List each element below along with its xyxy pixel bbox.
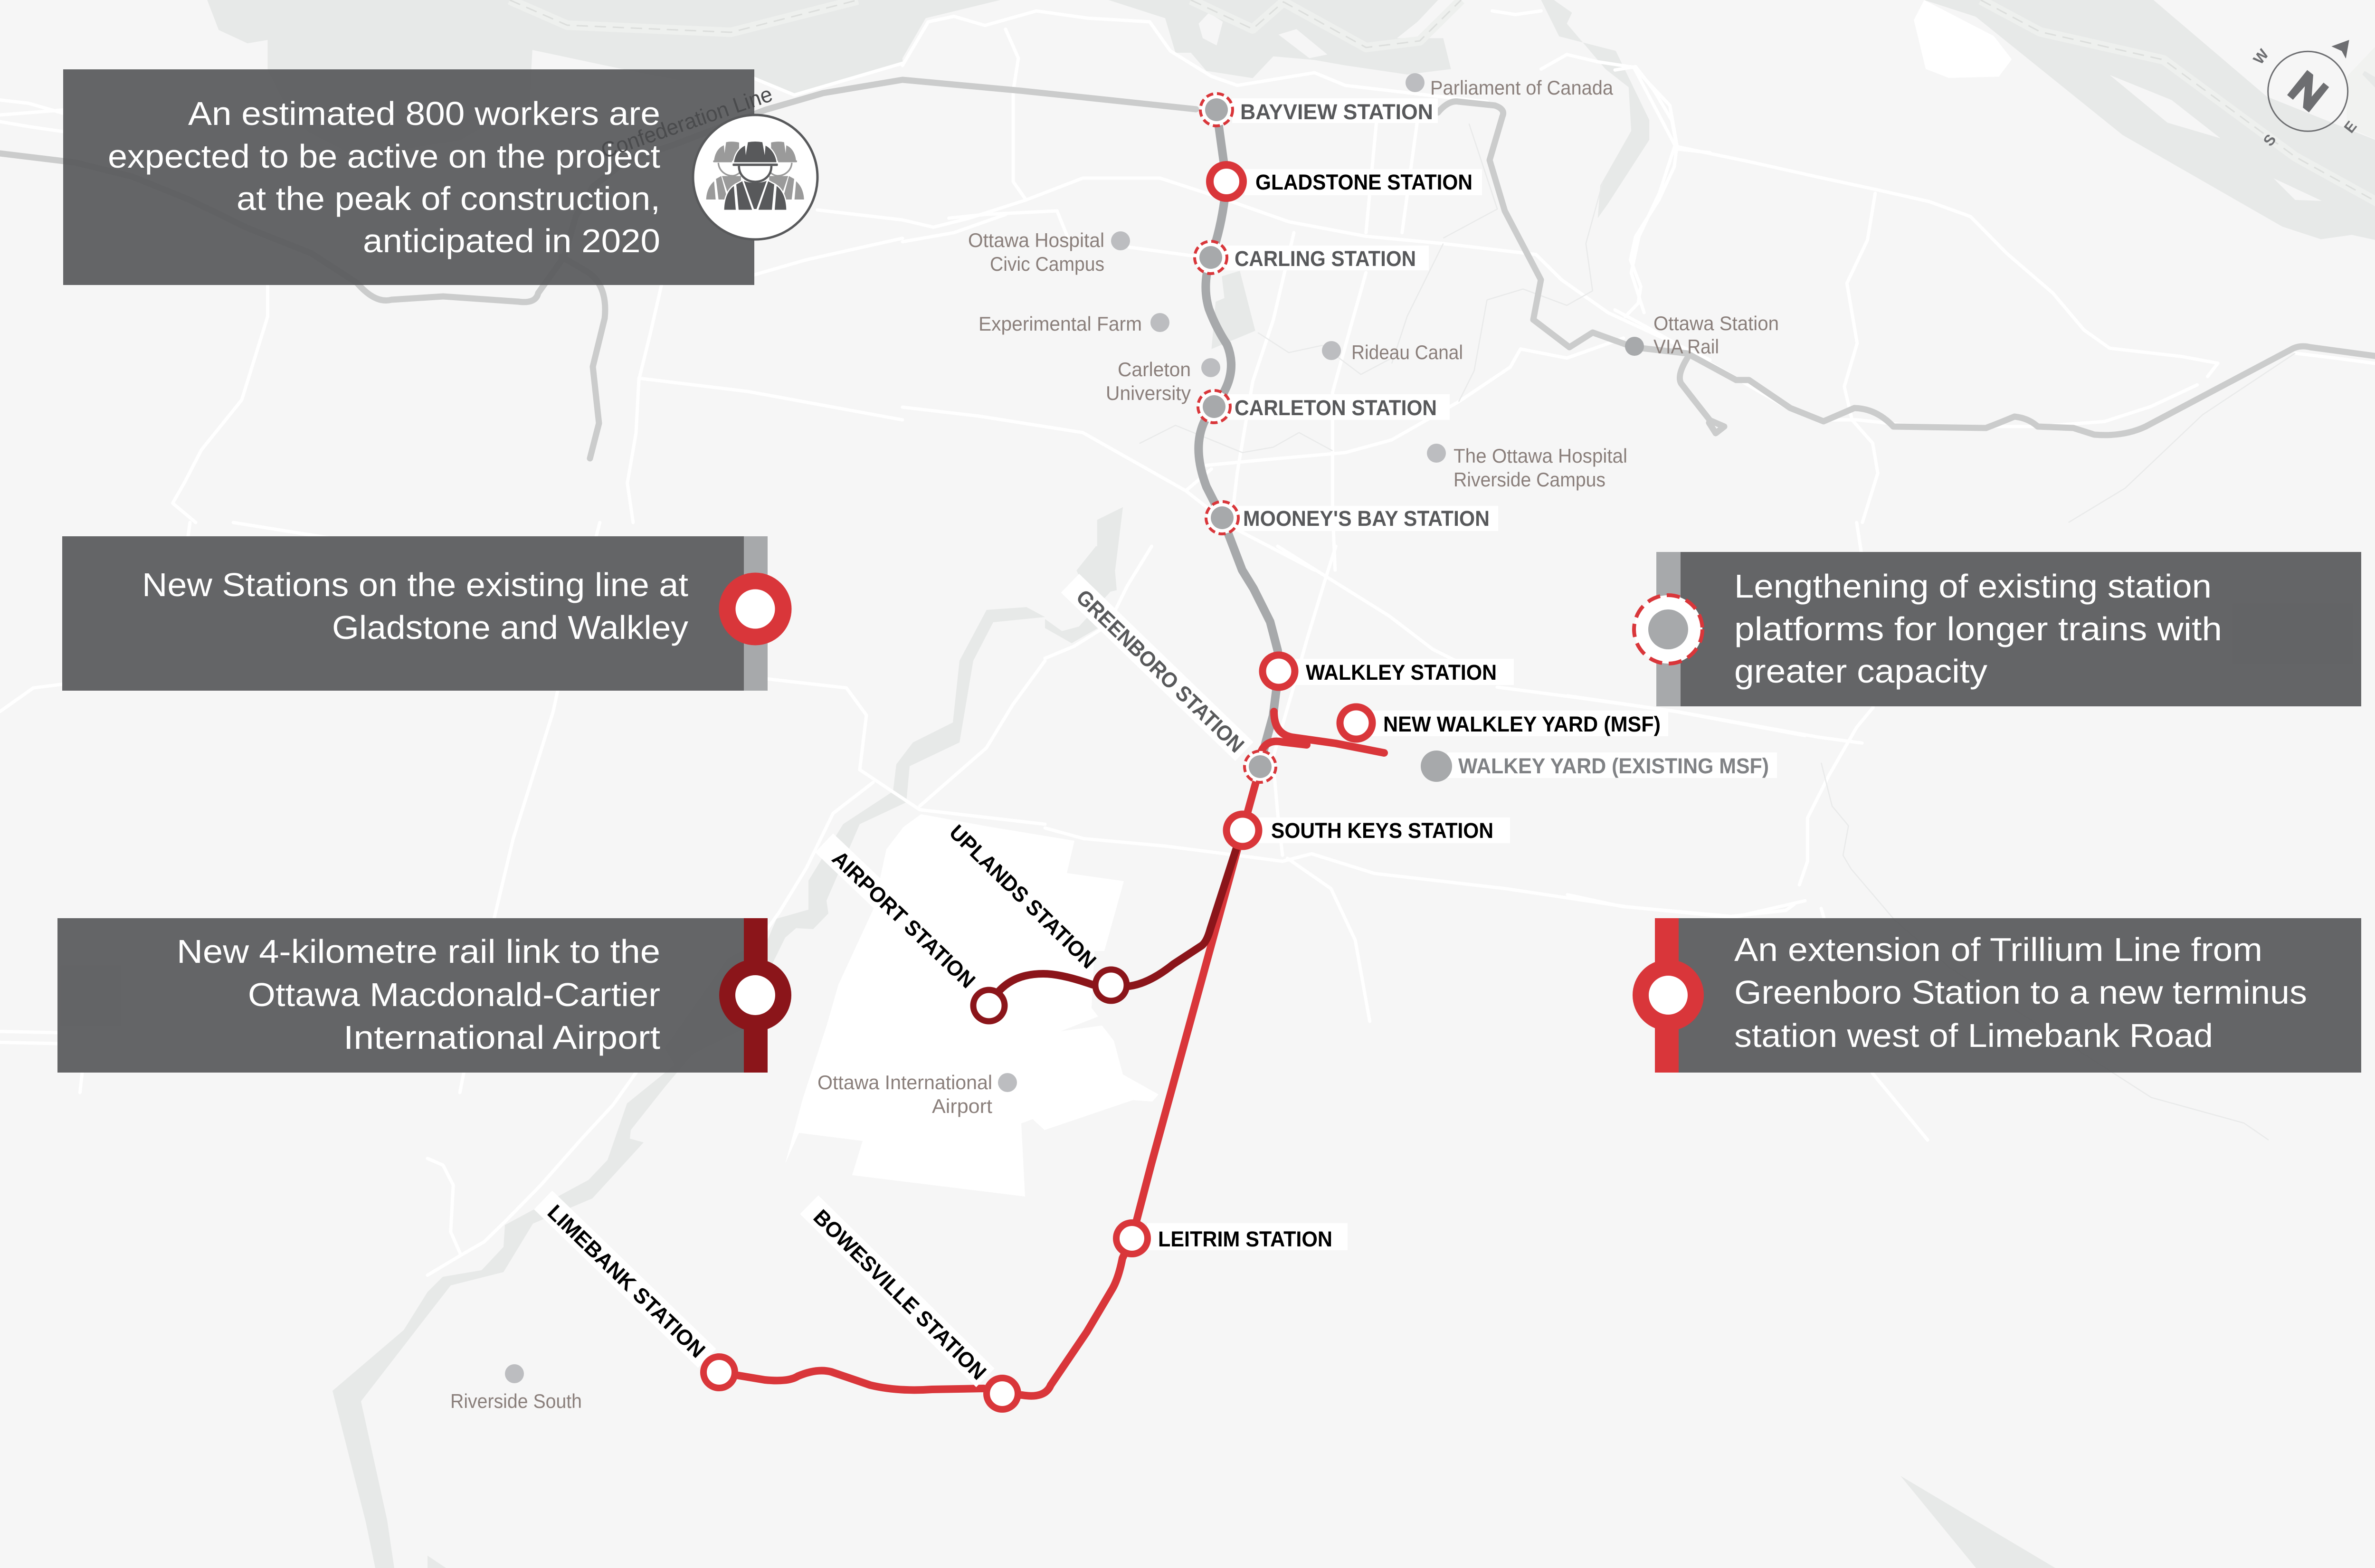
icon: new station marker <box>727 581 783 637</box>
panel text: platform lengthening: greater capacity <box>1734 653 1987 690</box>
station: Carling <box>1195 241 1429 274</box>
landmark: Experimental Farm: Experimental Farm <box>978 313 1142 335</box>
Confederation Line track <box>0 80 2375 458</box>
station: Carleton <box>1198 390 1450 423</box>
landmark: The Ottawa Hospital Riverside Campus <box>1427 444 1627 491</box>
station: Mooney's Bay <box>1206 502 1498 534</box>
station: Bayview: BAYVIEW STATION <box>1240 100 1433 124</box>
icon: compass <box>2250 40 2360 149</box>
station: Greenboro: GREENBORO STATION <box>1072 585 1249 757</box>
panel text: platform lengthening: platforms for longer trains with <box>1734 610 2222 647</box>
icon: compass: S <box>2260 131 2280 149</box>
landmark: Riverside South <box>450 1364 582 1412</box>
panel text: new stations: Gladstone and Walkley <box>332 609 688 646</box>
landmark: Ottawa Station VIA Rail: Ottawa Station <box>1653 312 1779 334</box>
panel: airport rail link legend <box>57 918 783 1073</box>
panel text: new stations <box>142 566 688 646</box>
panel: workers callout <box>63 69 817 285</box>
station: Limebank <box>534 1190 735 1388</box>
station: New Walkley Yard <box>1340 707 1668 739</box>
station: Airport <box>815 834 1005 1021</box>
station: Limebank: LIMEBANK STATION <box>543 1200 710 1362</box>
landmark: Carleton University <box>1106 358 1220 404</box>
landmark: Rideau Canal: Rideau Canal <box>1351 341 1463 363</box>
station: Uplands: UPLANDS STATION <box>945 820 1101 973</box>
panel text: line extension <box>1734 931 2307 1054</box>
existing Trillium Line (grey) <box>1198 110 1279 767</box>
landmark: Carleton University: Carleton <box>1118 358 1191 380</box>
panel text: workers: An estimated 800 workers are <box>188 95 660 132</box>
panel text: line extension: An extension of Trillium Line from <box>1734 931 2262 968</box>
panel text: line extension: Greenboro Station to a new terminus <box>1734 974 2307 1011</box>
station: Airport: AIRPORT STATION <box>827 846 980 993</box>
station: Carleton: CARLETON STATION <box>1235 396 1437 420</box>
panel text: airport link <box>177 933 660 1056</box>
landmark: Ottawa International Airport <box>817 1071 1017 1117</box>
station: Carling: CARLING STATION <box>1235 247 1416 271</box>
station: Leitrim <box>1116 1223 1348 1254</box>
landmark: The Ottawa Hospital Riverside Campus: Riverside Campus <box>1454 468 1606 491</box>
station: Gladstone: GLADSTONE STATION <box>1255 170 1472 194</box>
station: Leitrim: LEITRIM STATION <box>1158 1227 1332 1251</box>
icon: lengthened station marker <box>1634 595 1702 664</box>
panel: new stations legend <box>62 536 783 691</box>
icon: compass: W <box>2250 46 2272 67</box>
station: Mooney's Bay: MOONEY'S BAY STATION <box>1243 506 1490 531</box>
icon: extension marker <box>1641 968 1696 1023</box>
panel text: platform lengthening <box>1734 568 2222 690</box>
panel text: airport link: International Airport <box>343 1019 660 1056</box>
panel text: workers: at the peak of construction, <box>237 180 660 217</box>
station: New Walkley Yard: NEW WALKLEY YARD (MSF) <box>1383 712 1661 736</box>
Trillium extension line (red) <box>719 767 1260 1396</box>
station: Bowesville: BOWESVILLE STATION <box>809 1205 991 1385</box>
landmark: Ottawa International Airport: Ottawa International <box>817 1071 992 1093</box>
icon: construction workers <box>693 115 817 239</box>
panel text: workers: expected to be active on the project <box>108 138 660 175</box>
landmark: Carleton University: University <box>1106 382 1191 404</box>
landmark: Ottawa Hospital Civic Campus <box>968 229 1130 275</box>
panel text: line extension: station west of Limebank Road <box>1734 1017 2213 1054</box>
landmark: Ottawa Hospital Civic Campus: Civic Campus <box>990 253 1104 275</box>
airport rail link (dark red) <box>989 841 1239 1006</box>
station: Gladstone <box>1210 165 1482 198</box>
panel text: workers: anticipated in 2020 <box>363 222 660 259</box>
landmark: Ottawa International Airport: Airport <box>932 1095 992 1117</box>
landmark: Ottawa Hospital Civic Campus: Ottawa Hospital <box>968 229 1104 251</box>
station: Walkley <box>1263 655 1514 687</box>
landmark: The Ottawa Hospital Riverside Campus: The Ottawa Hospital <box>1454 445 1627 467</box>
icon: airport link marker <box>727 967 783 1023</box>
station: South Keys <box>1226 814 1510 846</box>
panel text: airport link: Ottawa Macdonald-Cartier <box>248 976 660 1013</box>
panel: line extension legend <box>1641 918 2361 1073</box>
icon: compass: E <box>2340 118 2360 136</box>
station: South Keys: SOUTH KEYS STATION <box>1271 818 1493 843</box>
panel text: new stations: New Stations on the existing line at <box>142 566 688 603</box>
panel text: platform lengthening: Lengthening of existing station <box>1734 568 2212 605</box>
landmark: Ottawa Station VIA Rail: VIA Rail <box>1653 335 1719 358</box>
landmark: Parliament of Canada: Parliament of Canada <box>1430 76 1614 99</box>
panel: platform lengthening legend <box>1634 552 2361 706</box>
base map: river border strips <box>510 0 2375 217</box>
station: Walkley: WALKLEY STATION <box>1306 660 1497 684</box>
station: Walkley Yard existing <box>1421 751 1777 782</box>
panel text: workers <box>108 95 660 259</box>
landmark: Ottawa Station VIA Rail <box>1625 312 1779 358</box>
landmark: Riverside South: Riverside South <box>450 1390 582 1412</box>
station: Bayview <box>1200 94 1438 126</box>
panel text: airport link: New 4-kilometre rail link to the <box>177 933 660 970</box>
maintenance yard tracks <box>1261 712 1384 753</box>
station: Walkley Yard existing: WALKEY YARD (EXISTING MSF) <box>1458 754 1769 778</box>
rail line name: Confederation Line: Confederation Line <box>598 81 776 163</box>
